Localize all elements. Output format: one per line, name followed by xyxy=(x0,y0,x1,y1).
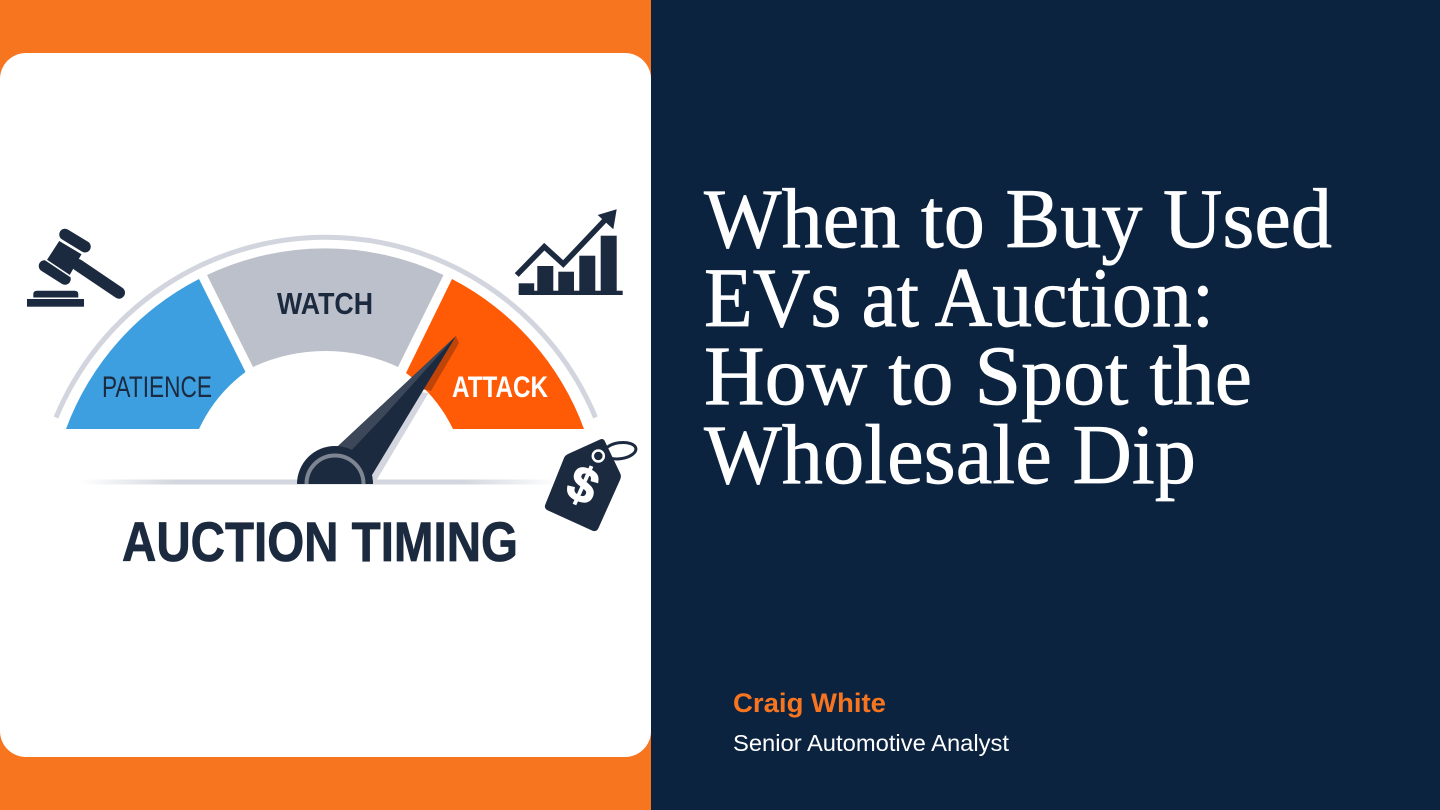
gauge segment: patience xyxy=(66,279,246,429)
title: Wholesale Dip xyxy=(704,408,1196,502)
icon: price tag: $ xyxy=(559,454,607,516)
gauge segment: patience: PATIENCE xyxy=(102,371,212,404)
illustration caption: auction timing: AUCTION TIMING xyxy=(122,510,518,573)
title xyxy=(704,172,1332,502)
icon: price tag xyxy=(545,439,637,531)
gauge needle xyxy=(297,336,459,484)
gauge segment: attack xyxy=(406,279,584,429)
panel: white image card xyxy=(0,53,651,757)
title: EVs at Auction: xyxy=(704,251,1214,345)
title: When to Buy Used xyxy=(704,172,1332,266)
icon: auction gavel xyxy=(27,234,119,307)
gauge: outer arc xyxy=(56,237,596,418)
gauge segment: watch: WATCH xyxy=(277,286,373,321)
panel: orange left background xyxy=(0,0,651,810)
gauge segment: attack: ATTACK xyxy=(452,371,548,404)
icon: rising bar chart with arrow xyxy=(517,209,623,295)
gauge baseline xyxy=(80,480,558,484)
author role: Senior Automotive Analyst xyxy=(733,730,1009,756)
gauge segment: watch xyxy=(207,248,444,367)
title: How to Spot the xyxy=(704,329,1252,423)
panel: navy right background xyxy=(651,0,1440,810)
author name: Craig White xyxy=(733,688,886,718)
